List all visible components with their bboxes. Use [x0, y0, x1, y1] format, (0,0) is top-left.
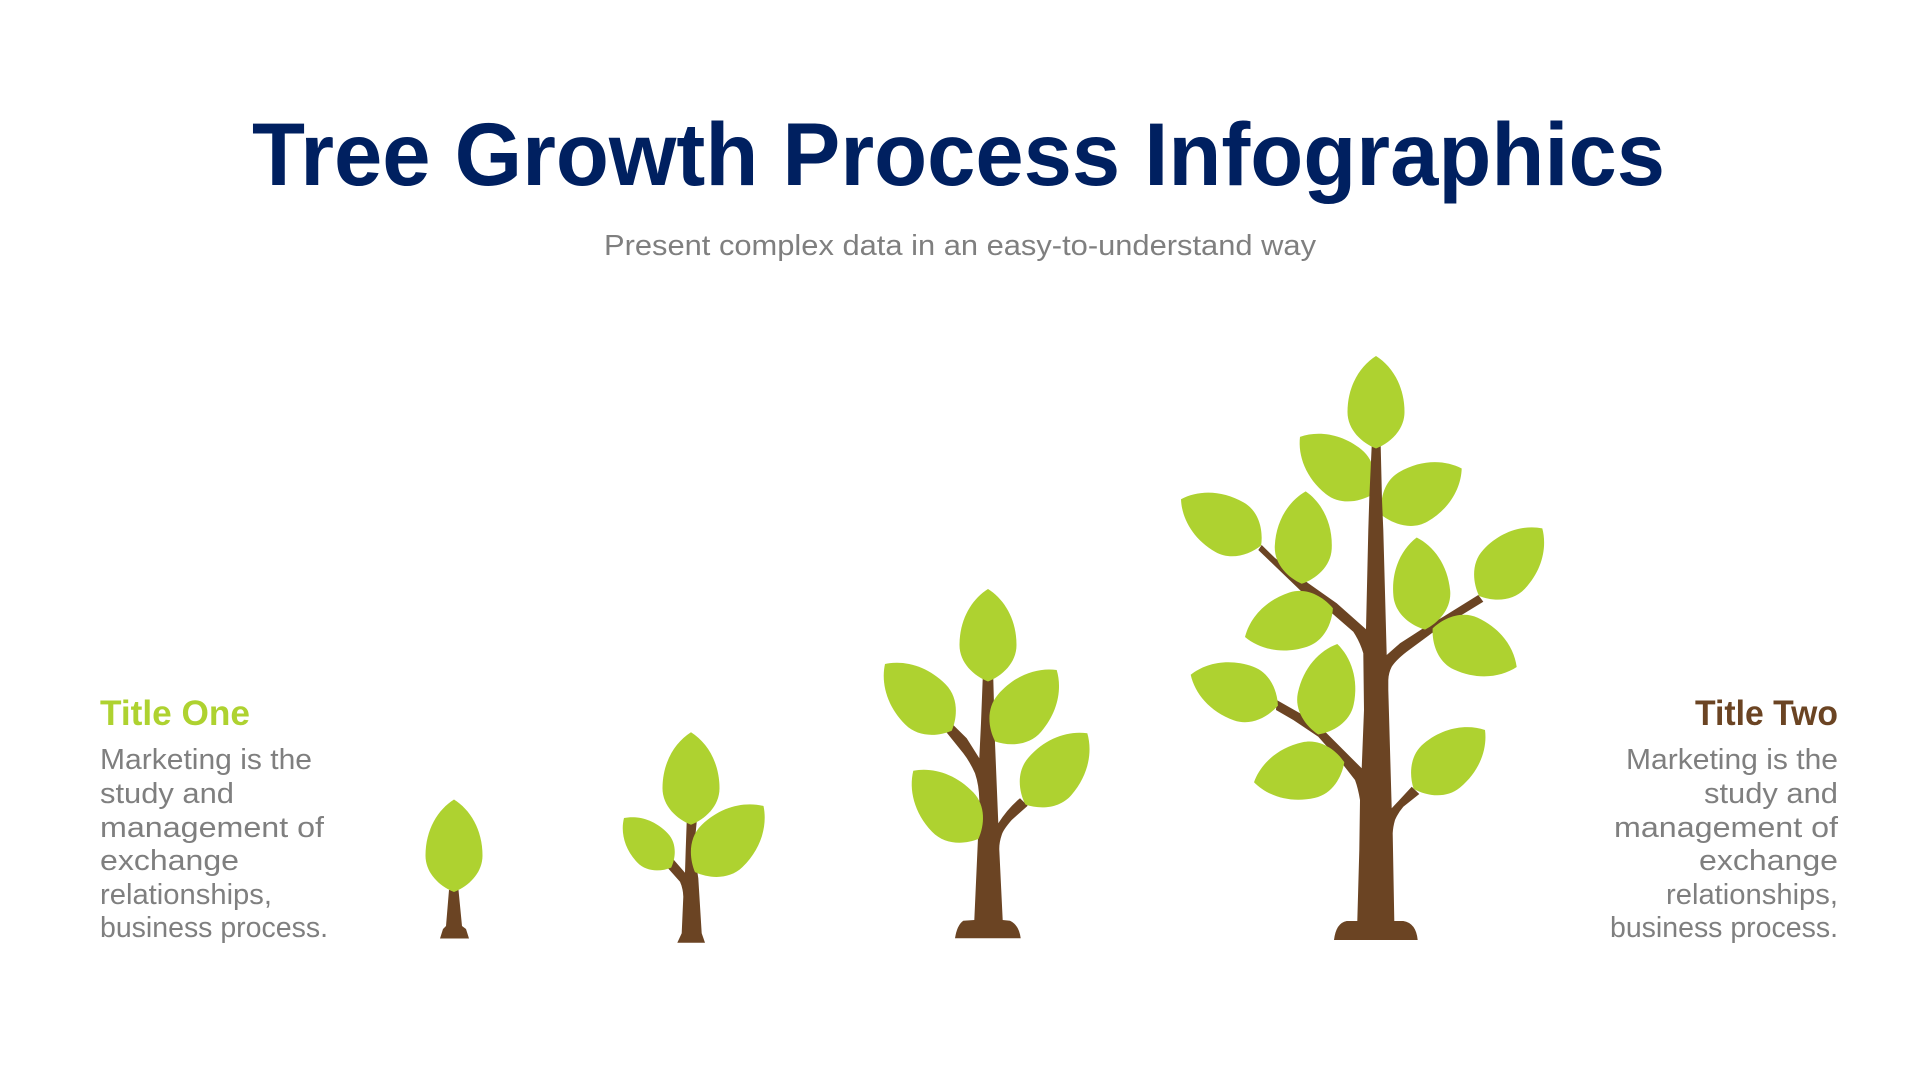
- body text: title one: [100, 744, 328, 944]
- trunk with branches: [946, 679, 1028, 938]
- text block: title two: [1610, 694, 1839, 944]
- body text: title two: exchange: [1699, 845, 1838, 877]
- body text: title one: study and: [100, 778, 234, 810]
- text block: title one: [100, 694, 328, 944]
- body text: title two: management of: [1614, 812, 1839, 844]
- body text: title one: exchange: [100, 845, 239, 877]
- body text: title two: study and: [1704, 778, 1838, 810]
- title: Tree Growth Process Infographics: [252, 104, 1665, 204]
- body text: title two: business process.: [1610, 912, 1838, 944]
- trunk: [440, 890, 469, 938]
- trunk with branches: [1258, 446, 1483, 940]
- body text: title two: Marketing is the: [1626, 744, 1838, 776]
- body text: title one: relationships,: [100, 879, 272, 911]
- tree stage 1: sprout: [426, 800, 482, 938]
- tree stage 3: young tree: [865, 589, 1109, 938]
- front leaves: [1167, 356, 1563, 811]
- tree stage 2: sapling: [609, 732, 784, 943]
- body text: title one: business process.: [100, 912, 328, 944]
- leaves: [609, 732, 784, 893]
- trunk with branch: [667, 822, 705, 943]
- leaf: [426, 800, 482, 892]
- body text: title one: Marketing is the: [100, 744, 312, 776]
- tree stage 4: mature tree: [1167, 356, 1563, 940]
- leaves: [865, 589, 1109, 859]
- heading: title one: Title One: [100, 694, 250, 733]
- back leaves: [1282, 415, 1476, 540]
- body text: title two: relationships,: [1666, 879, 1838, 911]
- heading: title two: Title Two: [1695, 694, 1838, 733]
- body text: title two: [1610, 744, 1839, 944]
- subtitle: Present complex data in an easy-to-understand way: [604, 230, 1317, 262]
- body text: title one: management of: [100, 812, 325, 844]
